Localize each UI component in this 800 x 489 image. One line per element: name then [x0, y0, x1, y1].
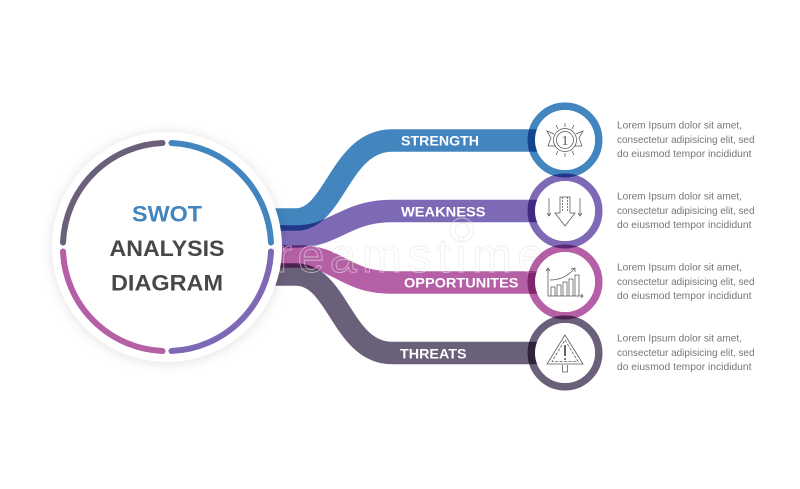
text block: opportunities: do eiusmod tempor incididunt	[617, 290, 752, 302]
icon: medal: 1	[562, 134, 568, 149]
text block: strength: Lorem Ipsum dolor sit amet,	[617, 120, 742, 132]
icon: growth chart	[546, 268, 583, 298]
text block: weakness: Lorem Ipsum dolor sit amet,	[617, 190, 742, 202]
text block: opportunities: Lorem Ipsum dolor sit amet,	[617, 262, 742, 274]
ring: weakness	[531, 177, 599, 245]
text block: strength: consectetur adipisicing elit, sed	[617, 134, 755, 146]
title: SWOT	[132, 202, 203, 226]
text block: opportunities	[617, 262, 755, 302]
label: threats: THREATS	[400, 346, 466, 362]
ring segments	[63, 143, 271, 351]
icon rings	[531, 106, 599, 387]
ring: opportunities	[531, 248, 599, 316]
text block: threats: consectetur adipisicing elit, sed	[617, 347, 755, 359]
text block: opportunities: consectetur adipisicing elit, sed	[617, 276, 755, 288]
text block: strength	[617, 120, 755, 160]
band: strength	[270, 140, 540, 220]
ring: strength	[531, 106, 599, 174]
text block: weakness: consectetur adipisicing elit, sed	[617, 205, 755, 217]
text block: strength: do eiusmod tempor incididunt	[617, 148, 752, 160]
text block: threats: Lorem Ipsum dolor sit amet,	[617, 332, 742, 344]
label: opportunities: OPPORTUNITES	[404, 275, 518, 291]
text block: weakness	[617, 190, 755, 231]
white disc	[52, 132, 282, 362]
band: threats	[270, 274, 540, 353]
text block: threats	[617, 332, 755, 373]
band: opportunities	[270, 256, 540, 282]
text block: weakness: do eiusmod tempor incididunt	[617, 219, 752, 231]
icon: medal	[547, 123, 583, 157]
title: DIAGRAM	[111, 270, 223, 296]
connector bands	[270, 140, 540, 353]
ring: threats	[531, 319, 599, 387]
band labels	[400, 133, 518, 362]
title: ANALYSIS	[110, 236, 224, 261]
main circle	[52, 132, 282, 362]
label: strength: STRENGTH	[401, 133, 479, 149]
watermark: dreamstime	[244, 230, 544, 283]
band: weakness	[270, 211, 540, 236]
title	[110, 202, 224, 296]
label: weakness: WEAKNESS	[401, 204, 486, 220]
text block: threats: do eiusmod tempor incididunt	[617, 361, 752, 373]
inner white discs	[535, 110, 595, 383]
icon: down arrows	[547, 197, 582, 226]
icon: warning triangle	[547, 335, 583, 372]
